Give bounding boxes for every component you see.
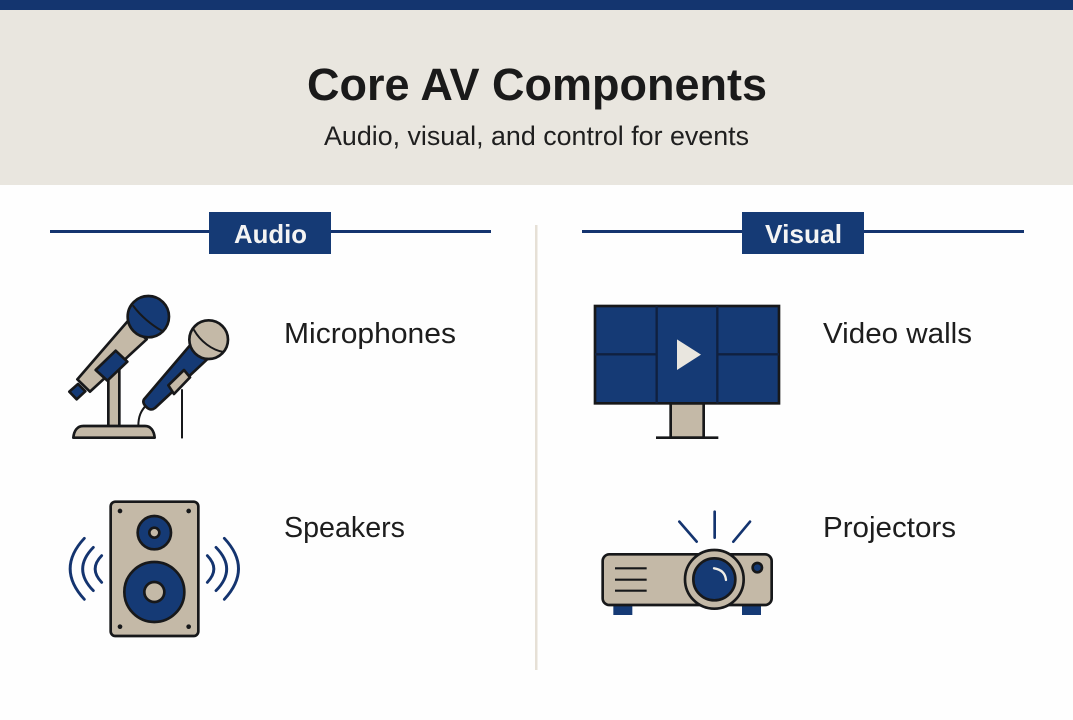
icon: microphones [69,296,228,438]
left mic [69,384,85,399]
panel: visual [582,212,1024,615]
title: Core AV Components [307,59,767,110]
light rays [679,512,750,542]
label: video walls: Video walls [823,318,972,350]
visual heading: Visual [765,219,842,249]
label: microphones: Microphones [284,318,456,350]
label: projectors: Projectors [823,512,956,544]
sound waves [70,538,238,599]
right mic [138,404,147,426]
panel: audio [50,212,491,636]
visual heading [582,212,1024,254]
icon: projector [603,512,772,615]
label: speakers: Speakers [284,512,405,544]
icon: speaker [70,502,238,636]
header band [0,0,1073,185]
icon: video wall [595,306,779,438]
audio heading: Audio [234,219,307,249]
subtitle: Audio, visual, and control for events [324,121,749,151]
audio heading [50,212,491,254]
center divider [535,225,538,670]
stand [108,370,119,427]
